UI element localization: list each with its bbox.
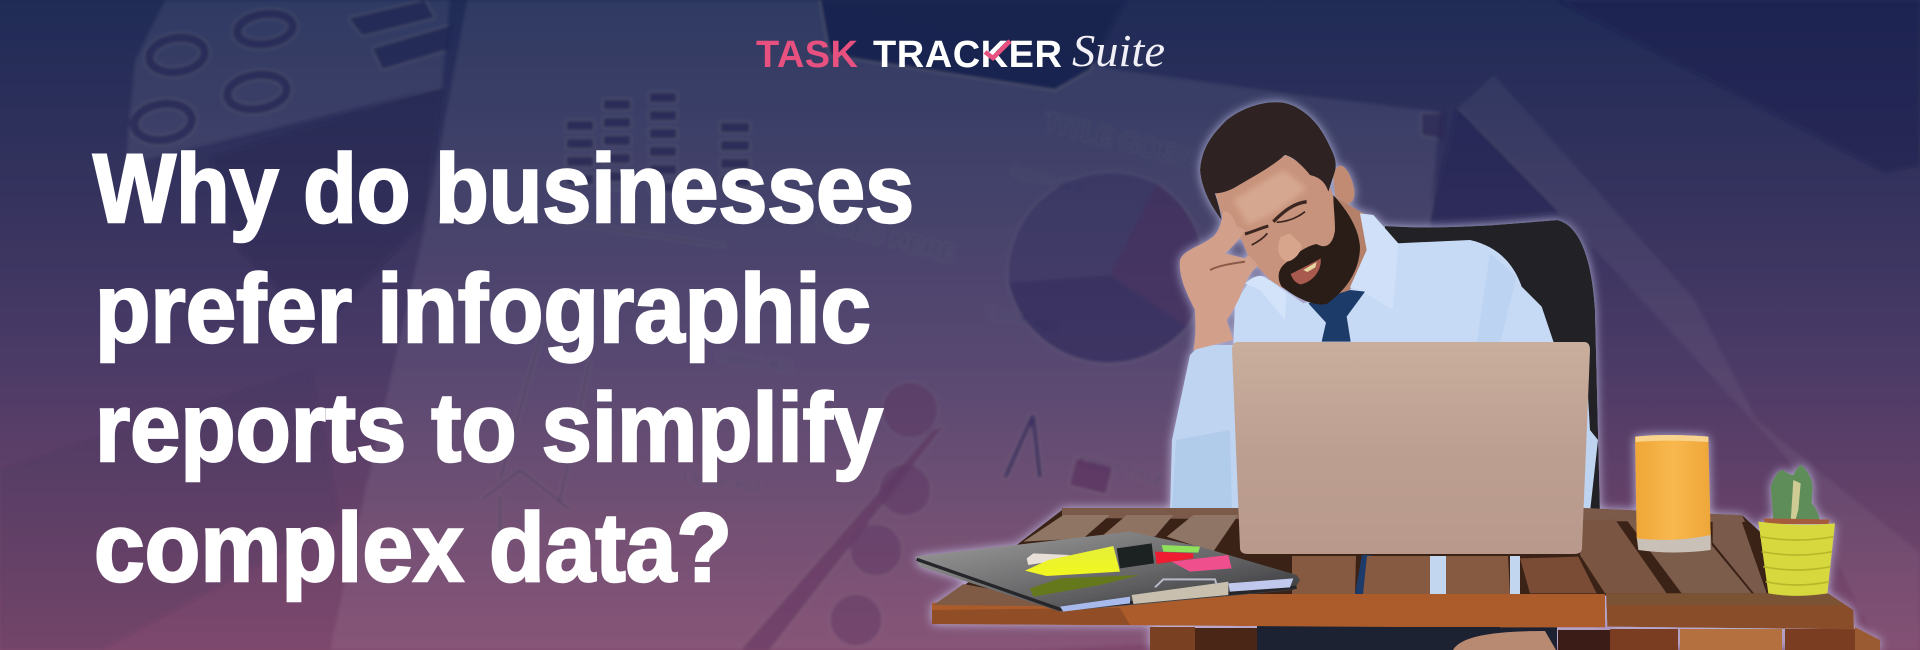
highlighter reflection bbox=[1030, 575, 1140, 597]
collar right bbox=[1350, 213, 1398, 310]
title: reports to simplify bbox=[95, 373, 883, 482]
pot bbox=[1758, 522, 1835, 596]
table right side bbox=[1500, 517, 1854, 629]
pot ribs bbox=[1760, 537, 1833, 585]
background: dark tablet top right bbox=[1557, 0, 1920, 172]
nose bbox=[1278, 233, 1302, 262]
slat gaps showing shirt and tie bbox=[1355, 555, 1520, 594]
background: report text: Option #03 bbox=[681, 467, 761, 498]
background: dark tags bbox=[348, 0, 450, 70]
background: report text: Option #01 bbox=[1009, 162, 1084, 197]
juice and cactus bbox=[1635, 435, 1835, 596]
orange front bbox=[1500, 594, 1605, 627]
shirt: lower body and sleeve bbox=[1170, 345, 1598, 512]
tie bbox=[1308, 290, 1365, 342]
background: lower left paper stack bbox=[0, 370, 340, 650]
shirt: sleeve shading bbox=[1172, 430, 1232, 512]
soil bbox=[1763, 518, 1830, 524]
highlighter cap bbox=[1117, 543, 1154, 568]
hand bbox=[1180, 211, 1257, 350]
left front lip bbox=[932, 594, 1605, 627]
green marker bbox=[1162, 545, 1200, 553]
slat C bbox=[1713, 517, 1767, 593]
background: donut charts bbox=[132, 10, 295, 144]
eyes and brows bbox=[1245, 202, 1307, 245]
cactus highlight bbox=[1791, 480, 1801, 522]
shirt sleeve fold bbox=[1477, 253, 1517, 343]
photo: stressed businessman at desk bbox=[915, 102, 1880, 650]
background: dark shape behind logo bbox=[820, 0, 1125, 90]
background: small red square bbox=[1069, 458, 1113, 494]
folder pages left bbox=[1060, 597, 1130, 612]
title: complex data? bbox=[94, 493, 732, 602]
background: report text bbox=[681, 107, 1274, 502]
right leg segments bbox=[1558, 630, 1610, 650]
shirt body bbox=[1233, 240, 1554, 343]
red marker bbox=[1155, 552, 1193, 564]
title bbox=[93, 134, 914, 602]
centre slats bbox=[1292, 556, 1510, 594]
logo: TRACKER: TRACKER bbox=[873, 34, 1062, 76]
background: bar chart bbox=[580, 92, 735, 195]
background: dark wedge right of paper bbox=[1428, 108, 1561, 223]
dark plank bbox=[1195, 628, 1257, 650]
folder cover bbox=[915, 532, 1300, 612]
brown front top bbox=[1606, 593, 1843, 605]
background: bar chart axis bbox=[560, 222, 725, 246]
finger crease bbox=[1210, 262, 1245, 270]
clip wire bbox=[1155, 579, 1217, 587]
juice bbox=[1635, 435, 1711, 540]
teeth bbox=[1303, 262, 1317, 272]
logo: check mark bbox=[985, 41, 1010, 58]
background: left paper with donut charts bbox=[125, 0, 450, 165]
background: letter circles bbox=[830, 382, 938, 646]
trousers bbox=[1257, 625, 1557, 650]
table surface under folder bbox=[933, 584, 1087, 607]
forehead highlight bbox=[1233, 170, 1307, 225]
background: house sketch on paper bbox=[482, 320, 590, 570]
brown front bbox=[1606, 593, 1854, 629]
background: compass bbox=[1005, 415, 1040, 478]
lower hand bbox=[1453, 631, 1556, 650]
highlighter body bbox=[1025, 546, 1120, 576]
background: report text: Option #03 bbox=[984, 302, 1059, 337]
folder with markers bbox=[915, 515, 1300, 612]
slat A bbox=[1580, 519, 1667, 593]
left table leg bbox=[1150, 627, 1195, 650]
background: report text: FIRST TITLE GOES bbox=[1077, 452, 1212, 502]
middle slat bbox=[1103, 515, 1173, 537]
folder pages right bbox=[1228, 578, 1293, 592]
juice top bbox=[1636, 435, 1708, 442]
background: pie chart bbox=[1008, 172, 1204, 363]
clipboard clip bbox=[1132, 582, 1228, 604]
logo bbox=[756, 25, 1165, 76]
slat left of front seam bbox=[1520, 557, 1597, 593]
title: Why do businesses bbox=[93, 134, 914, 243]
face bbox=[1215, 155, 1343, 303]
right slat bbox=[1167, 515, 1238, 552]
background: light strip right bbox=[1458, 75, 1920, 610]
background: report text: Option #01 bbox=[715, 347, 795, 378]
left slat bbox=[1023, 515, 1110, 542]
background: central paper bbox=[330, 0, 1440, 650]
background: dark gap below left paper bbox=[210, 87, 442, 330]
background: dark rectangle at paper corner bbox=[1421, 113, 1444, 140]
background: report text: TITLE GOES HERE bbox=[1041, 107, 1274, 192]
table back edge bbox=[1062, 508, 1745, 522]
ear bbox=[1333, 166, 1354, 204]
folder bottom edge bbox=[917, 559, 1297, 609]
under-table bbox=[1150, 625, 1880, 650]
table dark base bbox=[945, 510, 1828, 600]
background: report text: GOES HERE bbox=[814, 208, 959, 268]
laptop bbox=[1232, 342, 1590, 554]
neck bbox=[1327, 197, 1373, 303]
title: prefer infographic bbox=[95, 254, 871, 363]
mouth bbox=[1291, 258, 1321, 284]
glass base bbox=[1637, 535, 1711, 552]
beard bbox=[1279, 195, 1360, 304]
collar left bbox=[1245, 276, 1287, 320]
hair bbox=[1200, 102, 1336, 220]
background: lighter lower right bbox=[1786, 457, 1920, 650]
upper body bbox=[1180, 102, 1554, 350]
logo: Suite: Suite bbox=[1072, 25, 1165, 76]
pink marker bbox=[1172, 555, 1232, 572]
slat B bbox=[1627, 520, 1752, 593]
table top bbox=[932, 508, 1828, 627]
cactus bbox=[1771, 465, 1820, 522]
white marker bbox=[1027, 553, 1070, 565]
background: pencil bbox=[740, 425, 945, 650]
left front lip shadow bbox=[932, 608, 1130, 625]
logo: TASK: TASK bbox=[756, 34, 859, 76]
chair bbox=[1385, 220, 1600, 512]
